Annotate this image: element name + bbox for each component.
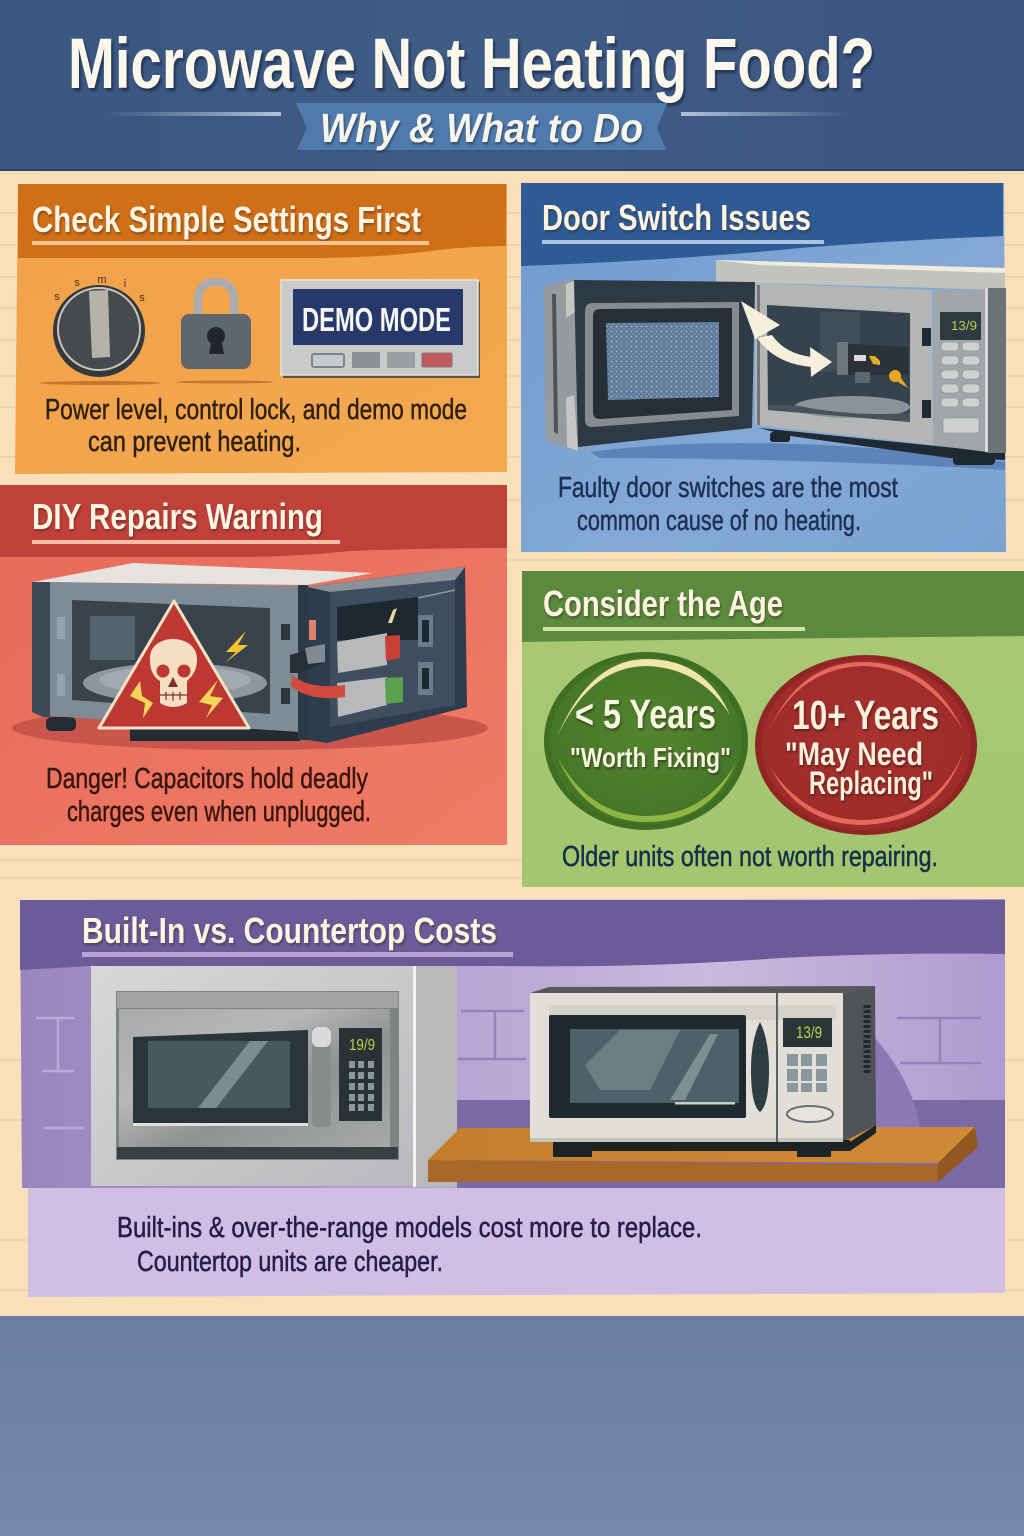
text: door switch description: [558, 472, 898, 537]
illustration: open microwave: [544, 260, 1006, 470]
panel: DIY repairs warning: [0, 485, 507, 845]
illustration: open microwave: 13/9: [951, 318, 977, 333]
icon: padlock: [176, 282, 274, 384]
icon: power dial: [40, 274, 160, 385]
text: costs description: [117, 1212, 702, 1278]
badge: under 5 years: < 5 Years: [575, 691, 716, 737]
icon: power dial: m: [97, 274, 107, 286]
header banner: [0, 0, 1024, 171]
icon: power dial: s: [54, 291, 60, 303]
text: costs description: Countertop units are cheaper.: [137, 1246, 443, 1278]
badge: 10 plus years: Replacing": [809, 765, 933, 801]
panel: consider the age: [522, 571, 1024, 887]
badge: under 5 years: [544, 652, 748, 830]
illustration: opened microwave with warning: [12, 563, 488, 750]
icon: power dial: s: [139, 292, 145, 304]
illustration: countertop microwave: [530, 986, 876, 1157]
text: danger description: charges even when unplugged.: [67, 796, 371, 828]
badge: 10 plus years: [755, 655, 977, 835]
text: door switch description: common cause of no heating.: [577, 505, 861, 537]
panel: door switch issues: [521, 183, 1006, 552]
badge: 10 plus years: 10+ Years: [792, 692, 939, 738]
panel: check simple settings first: [15, 184, 507, 474]
text: settings description: Power level, control lock, and demo mode: [45, 394, 467, 426]
illustration: wooden counter: [428, 1127, 978, 1182]
subtitle ribbon: Why & What to Do: [320, 105, 643, 151]
badge: 10 plus years: "May Need: [785, 736, 923, 772]
heading: consider the age: Consider the Age: [543, 583, 783, 624]
panel: built-in vs countertop costs: [20, 899, 1005, 1297]
text: age description: Older units often not worth repairing.: [562, 841, 938, 873]
text: settings description: [45, 394, 467, 458]
arrow: door to switch: [741, 301, 832, 377]
badge: under 5 years: "Worth Fixing": [570, 742, 731, 773]
text: danger description: [46, 763, 371, 828]
footer band: [0, 1316, 1024, 1536]
illustration: built-in microwave: [91, 966, 457, 1187]
icon: power dial: s: [74, 277, 80, 289]
icon: bolt in cavity: [225, 631, 248, 663]
heading: check simple settings: Check Simple Settings First: [32, 199, 421, 240]
icon: power dial: i: [124, 278, 126, 290]
heading: DIY repairs: DIY Repairs Warning: [32, 496, 323, 537]
text: door switch description: Faulty door switches are the most: [558, 472, 898, 504]
illustration: built-in microwave: 19/9: [349, 1037, 375, 1054]
heading: door switch: Door Switch Issues: [542, 197, 811, 238]
text: settings description: can prevent heating.: [88, 426, 301, 458]
text: danger description: Danger! Capacitors hold deadly: [46, 763, 368, 795]
text: costs description: Built-ins & over-the-range models cost more to replace.: [117, 1212, 702, 1244]
heading: built-in vs countertop: Built-In vs. Countertop Costs: [82, 910, 497, 951]
icon: demo mode display: [281, 280, 480, 378]
icon: door switch: [837, 342, 908, 388]
icon: warning triangle with skull: [99, 601, 249, 728]
illustration: countertop microwave: 13/9: [796, 1023, 822, 1042]
icon: demo mode display: DEMO MODE: [302, 301, 451, 338]
